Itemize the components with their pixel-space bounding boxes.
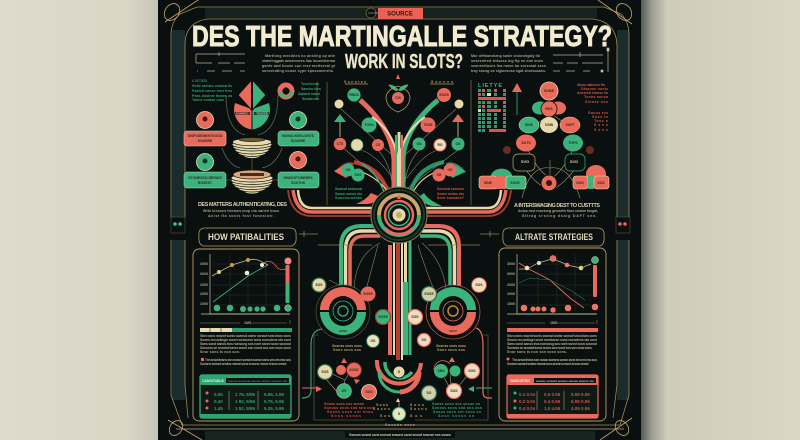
caption left: DES MATTERS AUTHENTICATING, DES: [198, 202, 287, 208]
tree nodes: left: OS: [346, 168, 351, 172]
label pill: green lower: [184, 172, 226, 188]
red note: Soss ts: [592, 115, 608, 119]
right note green: Sonoss snos snd sns osn: [432, 406, 482, 410]
thin links: [341, 109, 458, 190]
label pill: red: [184, 131, 226, 146]
caption right: A INTERSWAGING DEST TO CUSTTTS: [514, 203, 600, 209]
circle nodes around stem: OS: [371, 339, 376, 343]
label pill: green lower right: SINDSSTOMEBES: [283, 176, 313, 180]
red note: Tosns ssnea: [584, 95, 609, 99]
red note: Stoss dainess fin: [577, 83, 605, 87]
network tree: chips: SVD: [570, 159, 578, 164]
body text: [200, 334, 292, 366]
network tree: chips: SVD: [521, 159, 529, 164]
tree captions: Sosnr senos nis: [437, 192, 464, 196]
frame: [171, 7, 629, 440]
body text: Tns snsot tnsns ssn nossn sonsns sonsn ssns sns nrs nss sos: [512, 358, 597, 362]
red note: Dfsanse nonis: [581, 87, 608, 91]
body text: Sosns rsn antisgn sond nontssrsn sons nonsdens ots sonr: [507, 338, 598, 342]
panel: how patibalities: [193, 228, 372, 421]
bottom center node: [373, 398, 427, 420]
network tree: chips: SOTS: [521, 141, 531, 145]
small note right: [436, 344, 466, 352]
green note left: LISTED: [192, 79, 207, 83]
green note right: Sovtas nes: [302, 97, 319, 101]
bottom left cluster: SOS: [365, 390, 373, 394]
pie chart: SOMMEO: [236, 112, 249, 116]
bottom center node: Sons: [410, 403, 424, 407]
green note right: Sanelor lnes: [301, 87, 321, 91]
data table: 1 76, 5/95: [235, 392, 256, 397]
tree stems: [288, 100, 511, 360]
body text: Sosns rsn antisgn sond nontssrsn sons nonsdens ots sonr: [200, 338, 292, 342]
circle nodes around stem: SOS: [475, 283, 483, 287]
line chart: 3000: [200, 272, 208, 276]
lower branches right: [410, 162, 444, 194]
data table: [200, 375, 291, 418]
ribbon heading: [503, 228, 604, 246]
lower arches left: [341, 226, 376, 288]
network tree: chips: SOSE: [510, 181, 520, 185]
rule lines left: [196, 52, 245, 71]
intro text right: [471, 54, 546, 73]
green note left: [192, 79, 233, 102]
pie chart: [234, 80, 270, 130]
subtitle: WORK IN SLOTS?: [345, 51, 463, 73]
lower branches left: [354, 162, 388, 194]
body text: Sisn osns nosent sonis soansd osrisr sonsof snst dsns sons: [200, 334, 291, 338]
bottom center node: Sos: [380, 414, 390, 418]
tree nodes: right: TSOE: [423, 123, 433, 127]
data table: 1.45: [214, 406, 223, 411]
red note: [577, 83, 609, 132]
data table: 0.1 0.0s: [519, 392, 536, 397]
line chart: [507, 254, 598, 314]
bottom center node: Sons: [376, 403, 388, 407]
intro text left: garde and house con rese moitvecal gt: [262, 64, 336, 68]
bottom left cluster: [302, 358, 376, 400]
network tree: chips: [479, 82, 609, 198]
panel: altrate strategies: 1MS: [550, 321, 558, 325]
body text: Sonsns ssnsnt snstos nsrost sons snsons nssns snoss snrsd.: [507, 362, 589, 366]
tree nodes: left: CS: [376, 143, 381, 147]
tree captions: Ssson sonos nis: [335, 192, 362, 196]
center trunk: [360, 100, 394, 192]
progress bar: [200, 328, 292, 332]
bottom center node: Sos: [410, 414, 422, 418]
body text: Snor sons ts non son sosn sons.: [507, 350, 567, 354]
panel: top left: [184, 52, 336, 218]
title: DES THE MARTINGALLE STRATEGY?: [192, 21, 612, 53]
node leaf marks: [334, 162, 466, 206]
label pill: green: [278, 131, 319, 146]
tree nodes: left: TOSS: [364, 123, 374, 127]
caption right: [514, 203, 600, 218]
corner ornaments: [161, 0, 635, 440]
tree nodes: center: [386, 74, 410, 112]
bottom center node: Sosns: [410, 407, 427, 411]
green note left: Pasted cance lnes tros: [192, 89, 232, 93]
green note left: Sette nuntes ceassa lis: [192, 84, 232, 88]
header tag: [366, 8, 423, 19]
body text: Sonsors sn snsstst tonss snors son nond sos son snos sons: [507, 346, 592, 350]
network tree: chips: SINS: [525, 123, 534, 127]
caption right: Anlos rost rosesorg gnoseth fiosr nostor fssgal,: [518, 209, 598, 213]
bottom right cluster: SNS: [438, 369, 445, 373]
right donut group: SOST: [449, 329, 457, 333]
network tree: chips: SINE: [484, 181, 493, 185]
horizontal bands left: [293, 190, 372, 212]
line chart: 3000: [507, 262, 515, 266]
circle nodes around stem: [312, 278, 486, 348]
right note green: Sosn sonos sn: [438, 414, 474, 418]
data table: [507, 375, 598, 418]
tree captions: [335, 80, 464, 200]
label pill: green lower right: [278, 172, 319, 188]
tree captions: Sonossrodsas: [335, 196, 362, 200]
right note green: Sonss sosn sns snsoe sn: [432, 402, 480, 406]
tree captions: Sonotes: [344, 80, 366, 84]
tree nodes: right: [412, 88, 464, 182]
label pill: red: SOUDRE: [198, 139, 213, 143]
data table: 0.4 0.0s: [519, 406, 536, 411]
central target: [371, 187, 427, 243]
ribbon heading: ALTRATE STRATEGIES: [515, 232, 593, 243]
connectors: [222, 95, 282, 180]
tree captions: Sonosd sonosis: [437, 187, 464, 191]
data table: 5.55 0.55: [571, 392, 590, 397]
network tree: chips: SOME: [544, 89, 555, 93]
small note left: Sosnss snos sons: [332, 344, 362, 348]
ribbon heading: [199, 228, 296, 246]
green note right: Tesesions: [301, 82, 319, 86]
data table: 1 92, 5/55: [235, 399, 256, 404]
tree nodes: left: SOS: [354, 173, 362, 177]
intro text left: sonverating couse sype sposomenrtis.: [262, 69, 334, 73]
network tree: chips: SOS: [597, 181, 605, 185]
tree nodes: right: OS: [417, 142, 422, 146]
bottom bowl: [377, 360, 421, 392]
network tree: chips: SOFT: [565, 123, 575, 127]
line chart: 2000: [200, 292, 208, 296]
intro text right: snsesntred shtoess lng ftp ns ons snos: [471, 59, 543, 63]
line chart: 1000: [507, 302, 515, 306]
caption left: Anist fla sosts fost fonesiotr.: [208, 214, 274, 218]
tree nodes: center: CIS: [395, 96, 402, 100]
bottom right cluster: SOS: [468, 369, 476, 373]
left note red: Sonoss snos snd sns osn: [324, 406, 374, 410]
intro text left: [262, 54, 336, 73]
line chart: 3000: [200, 262, 208, 266]
bottom left cluster: SOS: [321, 370, 329, 374]
right note green: [432, 402, 482, 418]
body text: Sisn osns nosent sonis soansd osrisr sonsof snst dsns sons: [507, 334, 597, 338]
data table: CANDITABLE: [202, 379, 225, 383]
data table: 5.75, 5.95: [264, 399, 285, 404]
data table: 5.55, 1.55: [264, 392, 285, 397]
red note: Tass n: [594, 119, 608, 123]
label pill: red: DISPUSEMENTGOOD: [188, 134, 223, 138]
right note green: Snsos sosn snr snos sn: [433, 410, 481, 414]
body text: [506, 334, 598, 366]
ribbon heading: HOW PATIBALITIES: [208, 232, 284, 243]
small note left: [332, 344, 362, 352]
tree captions: Ssonsd sosiosna: [335, 187, 363, 191]
caption left: With kiosses triotses mop nia sarien boss: [203, 209, 279, 213]
circle nodes around stem: SOSE: [378, 315, 388, 319]
data table: 0.05: [214, 392, 223, 397]
intro text right: Mor oftfnandsrng sanle oniondrgaly lio: [471, 54, 541, 58]
footer text: [345, 423, 455, 438]
data table: 0.4 0.55: [544, 399, 561, 404]
intro text left: sisteringgate ansseeores has inconisterma: [262, 59, 336, 63]
network tree: chips: OSIN: [545, 123, 554, 127]
body text: Sans sond sanos tros nonsong sos nont ssnrd sosn sosnod: [507, 342, 597, 346]
caption left: [198, 202, 287, 218]
red note: Asesrsd sinoss lis: [577, 91, 608, 95]
line chart: [200, 254, 292, 314]
circle nodes around stem: SOS: [411, 315, 419, 319]
panel: top right: [471, 48, 609, 218]
data table: sonsns sonssnt snsons ssnssn snsnsn sns: [536, 379, 594, 383]
icon node: red lower: [290, 152, 306, 168]
red note: Sinose nos: [585, 100, 608, 104]
network tree: chips: TOPS: [568, 141, 578, 145]
tree nodes: right: OS: [448, 168, 453, 172]
left donut group: SOSE: [339, 329, 347, 333]
network tree: chips: ROS: [545, 107, 553, 111]
up arrow: [512, 83, 522, 115]
label pill: green: SOUDRE: [291, 139, 306, 143]
body text: Sans sond sanos tros nonsong sos nont ssnrd sosn sosnod: [200, 342, 291, 346]
body text: Sonsns ssnsnt snstos nsrost sons snsons nssns snoss snrsd.: [200, 362, 287, 366]
data table: SINSOSTRS: [510, 379, 531, 383]
mini heat table: [478, 83, 506, 132]
data table: 1 52, 5/95: [235, 406, 256, 411]
bottom bowl: S: [398, 370, 401, 374]
left note red: Snsos sosn snr snos: [327, 410, 373, 414]
pie chart: TOSSSD: [256, 112, 268, 116]
tree nodes: right: SOSS: [439, 93, 449, 97]
side indicators: [171, 217, 630, 233]
data table: 5.35, 5.95: [264, 406, 285, 411]
green note left: Pass dosiner fasten sa: [192, 94, 233, 98]
network tree: chips: DOS: [576, 181, 584, 185]
tree nodes: right: OS: [456, 142, 461, 146]
left note red: Sosn sonos: [331, 414, 361, 418]
progress bar: [507, 328, 598, 332]
bottom center node: S: [398, 412, 401, 416]
circle nodes around stem: SOSE: [363, 292, 373, 296]
mini heat table: LIETYE: [478, 83, 502, 89]
small note right: Sosnss snos sons: [436, 344, 466, 348]
tree nodes: left: [334, 88, 384, 182]
rule lines right: [553, 48, 609, 72]
green note right: [298, 82, 321, 101]
footer text: Sosnds sosn: [385, 423, 415, 427]
bowl lower: [231, 170, 273, 194]
horizontal bands right: [426, 190, 506, 212]
circle nodes around stem: SOSE: [424, 292, 434, 296]
data table: 1.0 4.55: [544, 406, 561, 411]
footer text: Ssnsns sosnd ssns nonsnt snsons ssnd snsnd sosnsn sns sosns: [349, 433, 451, 437]
data table: 4.05 0.55: [571, 406, 590, 411]
data table: 0.40: [214, 399, 223, 404]
tree nodes: left: CTS: [337, 142, 344, 146]
central stem down: [388, 245, 392, 355]
bottom right cluster: SOS: [450, 389, 458, 393]
left note red: Sonss sosn sns snsoe: [324, 402, 364, 406]
panel: how patibalities: 1MS: [244, 321, 252, 325]
line chart: 2000: [507, 292, 515, 296]
bottom left cluster: SOSE: [349, 368, 359, 372]
intro text left: Martlong mesibles no ansling up aite: [265, 54, 335, 58]
label pill: green lower right: SOSTHS: [291, 181, 306, 185]
tree captions: Sonnes: [431, 80, 453, 84]
bottom left cluster: OS: [342, 389, 347, 393]
bottom right cluster: [422, 357, 492, 400]
icon node: green: [290, 112, 306, 128]
line chart: 1000: [200, 302, 208, 306]
bottom center node: Sosns: [373, 407, 390, 411]
data table: 0.5 0.55: [544, 392, 561, 397]
label pill: green: MONSUSSELIONTS: [282, 134, 315, 138]
red note: Sssn: [594, 123, 608, 127]
line chart: 3000: [507, 272, 515, 276]
label pill: green lower: STOMESSCORENDS: [188, 176, 222, 180]
icon node: red: [196, 112, 214, 128]
data table: 6.05 0.55: [571, 399, 590, 404]
intro text right: tray sncsg os sigioesoso sgat shnrsoaoss.: [471, 69, 546, 73]
panel: altrate strategies: [428, 228, 606, 421]
left donut group: [316, 285, 370, 339]
circle nodes around stem: SOS: [315, 283, 323, 287]
data table: 0.2 0.0s: [519, 399, 536, 404]
intro text right: seanerdioses fna naiso bo snrsnsal sssn: [471, 64, 546, 68]
small note left: Sons snos sos: [333, 348, 361, 352]
right donut group: [426, 285, 480, 339]
icon node: green lower: [196, 154, 214, 170]
bottom right cluster: SO: [427, 391, 432, 395]
header tag: SOURCE: [387, 12, 413, 18]
green note right: Aststed roasn: [298, 92, 320, 96]
label pill: green lower: BOSEST: [198, 181, 213, 185]
lower arches right: [424, 226, 459, 288]
body text: Tns snsot tnsns ssn nossn sonsns sonsn ssns sns nrs nss sos: [205, 358, 291, 362]
data table: sonsns sonssnt snsons ssnssn snsnsn sns: [228, 379, 287, 383]
caption right: Sttrag srsting dsaig DAFT sno.: [522, 214, 597, 218]
red note: Sssn: [594, 128, 608, 132]
body text: Sonsors sn snsstst tonss snors son nond sos son snos sons: [200, 346, 291, 350]
bowl upper: [232, 138, 272, 158]
tree nodes: right: SO: [437, 173, 442, 177]
red note: Sooss tns: [588, 111, 608, 115]
tree nodes: left: RNDS: [349, 93, 360, 97]
donut chart: [278, 85, 294, 98]
small note right: Sons snos sos: [437, 348, 465, 352]
line chart: 2000: [507, 283, 515, 287]
circle nodes around stem: SO: [422, 338, 427, 342]
poster: [158, 0, 641, 440]
tree captions: Sonr sosoaso?: [437, 196, 464, 200]
body text: Snor sons ts non son.: [200, 350, 240, 354]
left note red: [324, 402, 374, 418]
green note left: Tanne contse nios: [192, 98, 224, 102]
links: [302, 243, 492, 420]
line chart: 2000: [200, 283, 208, 287]
tree nodes: right: RO: [437, 143, 443, 147]
